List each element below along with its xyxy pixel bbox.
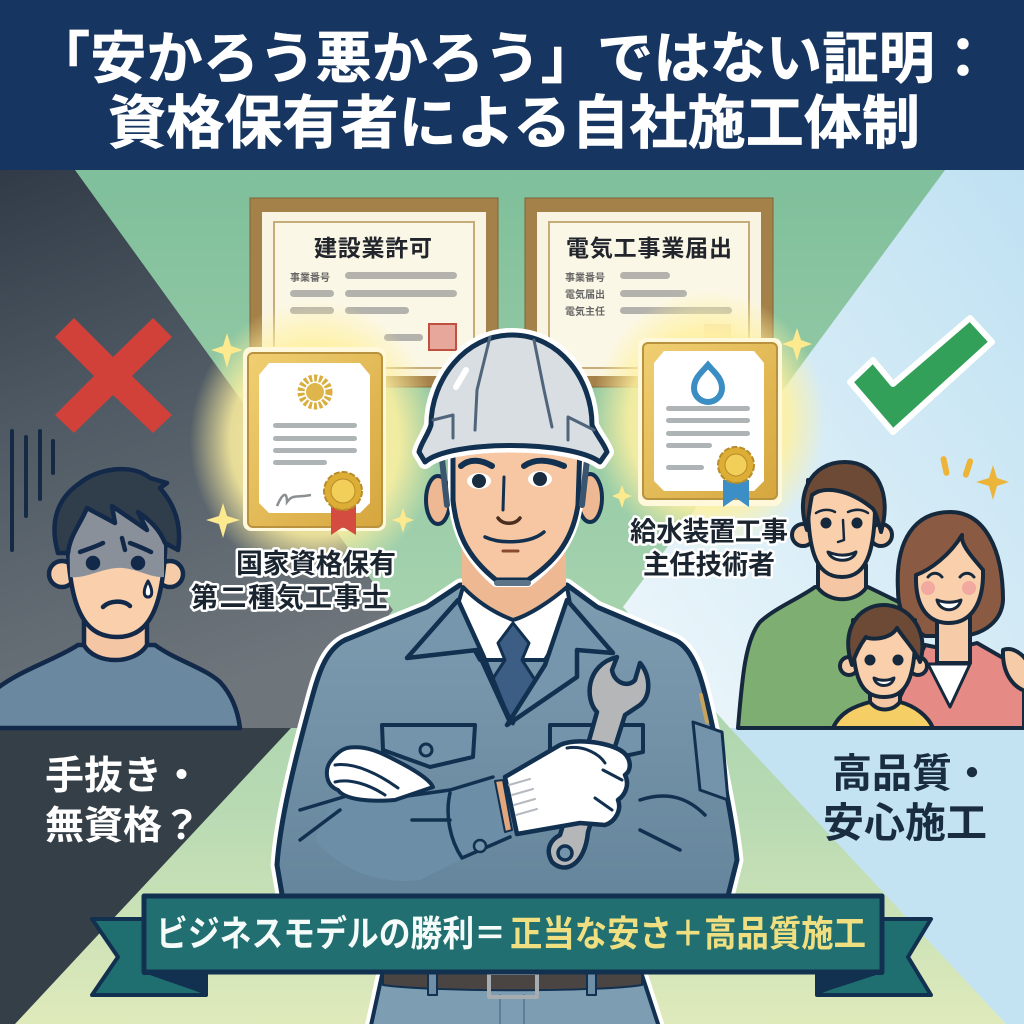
face: [453, 445, 580, 580]
orange cuff: [495, 780, 512, 832]
framed certificate: 電気工事業届出: [525, 198, 773, 387]
pants: [370, 975, 660, 1024]
tie: [492, 623, 535, 724]
forearm sleeve: [315, 778, 510, 881]
certificate label: right: 給水装置工事: [630, 517, 788, 547]
framed certificate: 建設業許可: [250, 198, 498, 387]
mother hand: [1003, 649, 1024, 692]
brows: [461, 461, 564, 466]
belt loops: [428, 965, 596, 995]
glow behind small certificates: [190, 300, 440, 580]
jacket body: [277, 585, 737, 900]
small certificate: 第二種電気工事士: [243, 347, 386, 535]
framed certificate: 電気工事業届出: 電気届出: [565, 288, 605, 301]
mother white shirt: [928, 664, 970, 707]
ribbon tail left: [92, 919, 206, 995]
helmet: [419, 335, 607, 462]
worker character: [277, 335, 737, 1024]
left lapel: [407, 600, 510, 722]
mother eyes and nose: [928, 573, 974, 577]
face: [67, 500, 166, 637]
banner text: 正当な安さ＋高品質施工: [510, 913, 866, 954]
eye whites: [467, 473, 491, 489]
belt: [383, 965, 642, 990]
helmet straps: [441, 450, 588, 505]
father neck: [818, 565, 866, 599]
left caption: 無資格？: [45, 805, 201, 848]
banner text: [156, 913, 866, 954]
background: left dark wedge: [0, 170, 393, 728]
ears: [426, 476, 450, 524]
right caption: 安心施工: [823, 800, 987, 846]
ribbon folds: [144, 973, 882, 995]
right caption: 高品質・: [832, 752, 992, 796]
right caption: [823, 752, 992, 846]
eyes: [88, 558, 98, 568]
white shirt: [455, 587, 572, 660]
jacket white outline: [277, 585, 737, 900]
father face: [808, 480, 875, 577]
face outline halo: [453, 445, 580, 582]
background: lower-left dark panel: [0, 728, 291, 1024]
child hair: [848, 605, 922, 665]
mother face: [916, 535, 983, 623]
sleeve pocket and pen: [693, 722, 728, 800]
sweater: [0, 645, 240, 728]
left caption: [45, 755, 201, 848]
icon: gold seal with red ribbon: [324, 472, 362, 535]
mouth: [485, 532, 544, 542]
face shadow: [69, 503, 164, 577]
left pocket: [382, 725, 475, 767]
father smile: [828, 552, 856, 560]
right glove fingers: [567, 747, 622, 810]
child shirt: [833, 702, 933, 728]
left pocket button: [420, 744, 432, 756]
mother cheeks: [921, 581, 935, 595]
helmet highlight: [456, 370, 466, 387]
small certificate: 給水装置工事主任技術者: [638, 338, 782, 507]
gloom lines: [12, 431, 53, 550]
cuff button: [474, 840, 486, 852]
father brows: [816, 510, 868, 542]
neck: [84, 620, 147, 660]
mother hair back: [898, 512, 1003, 636]
certificate label: left: [191, 549, 396, 613]
child face: [853, 620, 915, 697]
neck: [462, 550, 566, 625]
hair: [54, 469, 179, 553]
right lapel: [507, 600, 613, 725]
wrench: [549, 657, 648, 868]
mother smile: [937, 600, 961, 610]
framed certificate: 電気工事業届出: 電気主任: [565, 305, 605, 318]
worried customer: [0, 469, 240, 728]
framed certificate: 建設業許可: 建設業許可: [314, 235, 432, 261]
title: 「安かろう悪かろう」ではない証明：: [34, 27, 991, 90]
pants creases: [500, 995, 524, 1024]
crossed arm fold lines: [300, 777, 705, 858]
belt buckle: [489, 973, 537, 997]
sparkles: [206, 328, 812, 538]
left glove: [327, 747, 433, 801]
ears: [49, 561, 75, 587]
icon: gold sun: [301, 378, 329, 406]
left caption: 手抜き・: [45, 755, 201, 798]
icon: red X: [55, 318, 172, 433]
certificate label: right: [630, 517, 788, 580]
header band: [0, 0, 1024, 170]
eyes: [472, 474, 486, 488]
ribbon body: [144, 896, 882, 972]
title: 資格保有者による自社施工体制: [108, 91, 920, 156]
helmet halo: [419, 335, 607, 462]
framed certificate: 電気工事業届出: 電気工事業届出: [566, 235, 732, 261]
mother top: [885, 643, 1024, 728]
framed certificate: 建設業許可: 事業番号: [290, 271, 330, 284]
right pocket: [550, 725, 643, 757]
mother neck: [937, 610, 970, 663]
father sweater: [738, 587, 905, 728]
father ears: [792, 524, 814, 546]
background: lower-right blue panel: [730, 728, 1024, 1024]
certificate label: left: 国家資格保有: [236, 549, 396, 579]
child neck: [870, 690, 900, 710]
banner text: ビジネスモデルの勝利＝: [156, 913, 506, 954]
framed certificate: 電気工事業届出: 事業番号: [565, 271, 605, 284]
certificate label: right: 主任技術者: [643, 550, 775, 580]
background: right light-blue wedge: [623, 170, 1024, 728]
banner ribbon: [92, 896, 931, 995]
icon: gold seal with blue ribbon: [718, 447, 754, 507]
child ears: [840, 657, 858, 675]
left glove fingers: [335, 765, 398, 795]
ribbon tail right: [817, 919, 931, 995]
helmet ridge: [433, 337, 594, 440]
icon: green check: [850, 318, 992, 432]
child eyes: [866, 656, 874, 664]
child smile: [874, 678, 894, 686]
sparkle and dashes near family: [940, 456, 1009, 500]
father eyes: [822, 520, 830, 526]
icon: water drop: [694, 365, 722, 402]
certificate label: left: 第二種気工事士: [191, 583, 389, 613]
brows and mouth: [80, 538, 151, 607]
chin strap: [497, 580, 528, 586]
right glove: [505, 741, 630, 834]
nose: [503, 477, 504, 510]
happy family: [738, 462, 1024, 728]
tear: [144, 581, 152, 597]
title: [34, 27, 991, 156]
father hair: [803, 462, 885, 532]
glove knit ribs: [509, 779, 537, 815]
